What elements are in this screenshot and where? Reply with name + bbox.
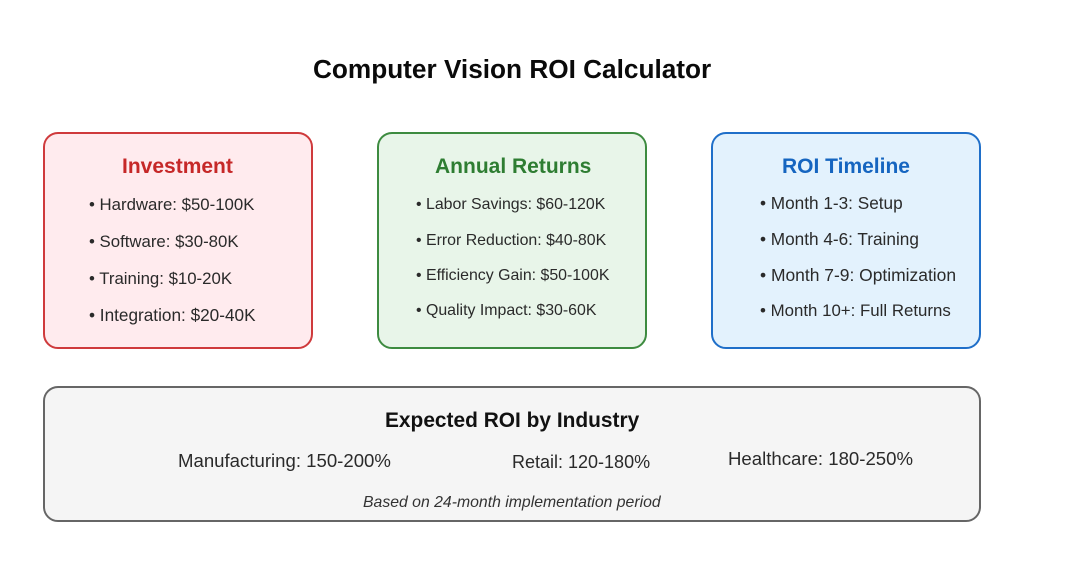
list: returns items: • Quality Impact: $30-60K — [416, 302, 596, 319]
heading: annual returns: Annual Returns — [435, 154, 591, 178]
heading: expected roi: Expected ROI by Industry — [385, 408, 639, 432]
panel: investment — [43, 132, 313, 349]
list: investment items: • Software: $30-80K — [89, 232, 239, 250]
list: investment items: • Hardware: $50-100K — [89, 194, 254, 214]
list: timeline items — [760, 192, 956, 320]
stat: retail: Retail: 120-180% — [512, 452, 650, 472]
list: timeline items: • Month 1-3: Setup — [760, 192, 903, 212]
panel: annual returns — [377, 132, 647, 349]
list: investment items: • Integration: $20-40K — [89, 304, 256, 324]
title: Computer Vision ROI Calculator — [313, 54, 711, 84]
footnote: Based on 24-month implementation period — [363, 494, 661, 511]
panel: expected roi by industry — [43, 386, 981, 522]
list: returns items: • Efficiency Gain: $50-100K — [416, 267, 609, 284]
list: investment items — [89, 194, 256, 324]
list: returns items: • Error Reduction: $40-80K — [416, 232, 606, 249]
panel: roi timeline — [711, 132, 981, 349]
heading: roi timeline: ROI Timeline — [782, 154, 910, 178]
list: returns items — [416, 196, 610, 319]
list: timeline items: • Month 7-9: Optimization — [760, 264, 956, 284]
stat: healthcare: Healthcare: 180-250% — [728, 448, 913, 469]
stat: manufacturing: Manufacturing: 150-200% — [178, 450, 391, 471]
list: returns items: • Labor Savings: $60-120K — [416, 196, 605, 213]
list: timeline items: • Month 4-6: Training — [760, 228, 919, 248]
heading: investment: Investment — [122, 154, 233, 178]
list: investment items: • Training: $10-20K — [89, 268, 232, 288]
list: timeline items: • Month 10+: Full Returns — [760, 301, 951, 320]
